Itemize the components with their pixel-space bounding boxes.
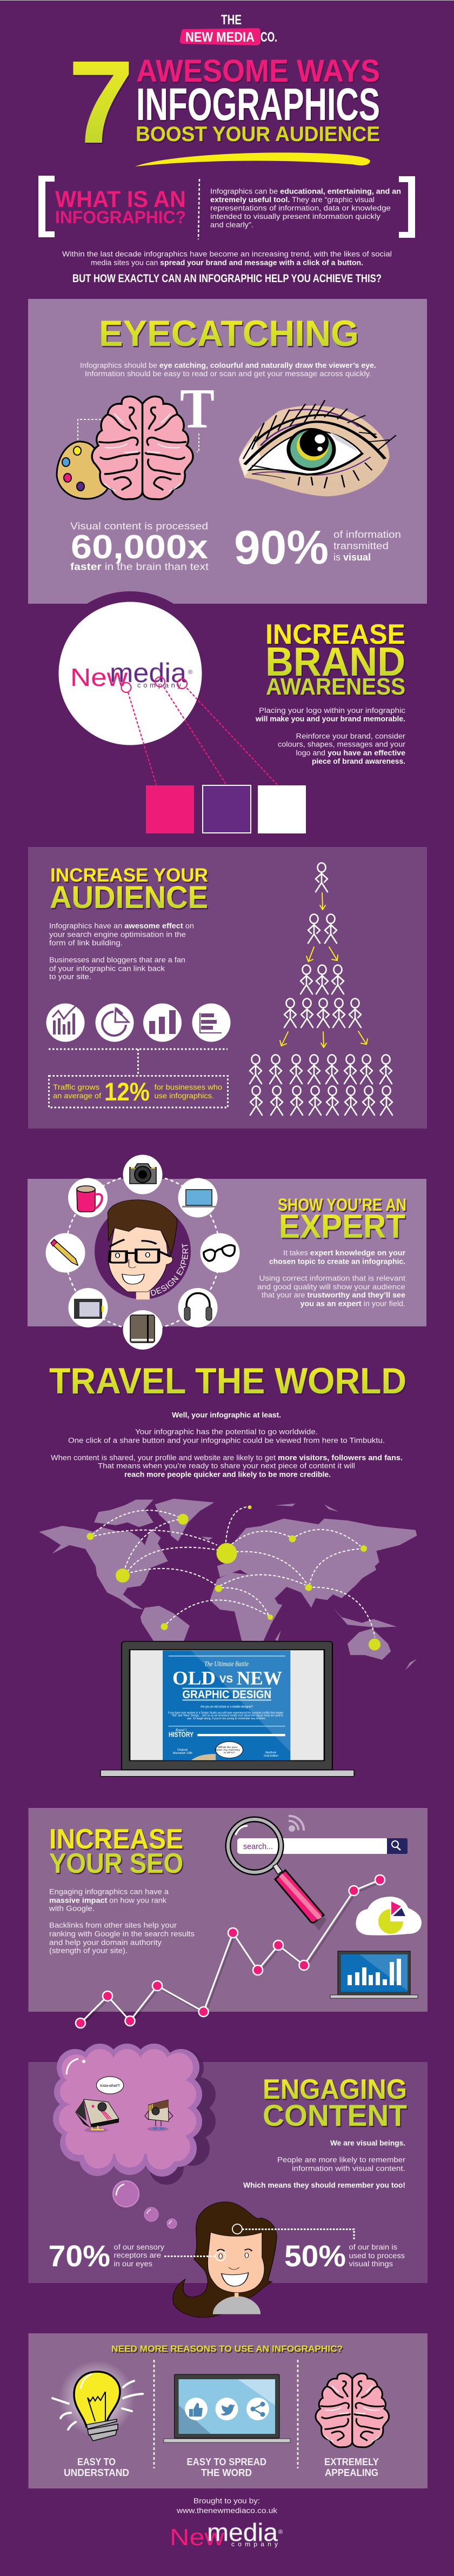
audience text: Businesses and bloggers that are a fan bbox=[49, 956, 185, 964]
heading: increase your seo: INCREASE bbox=[49, 1824, 183, 1855]
stat: 50% bbox=[232, 2224, 405, 2273]
connector and traffic callout: an average of bbox=[53, 1091, 101, 1100]
expert text: It takes expert knowledge on your bbox=[283, 1249, 406, 1257]
heading: increase brand awareness: BRAND bbox=[265, 639, 405, 684]
expert text: chosen topic to create an infographic. bbox=[269, 1257, 405, 1266]
brand text: logo and you have an effective bbox=[296, 749, 406, 757]
stat: 90%: is visual bbox=[333, 551, 371, 563]
panel: what is an infographic: and clearly”. bbox=[210, 221, 253, 229]
laptop with infographic: OLD bbox=[172, 1667, 216, 1689]
audience text bbox=[49, 922, 194, 980]
icon: brain bbox=[316, 2373, 389, 2447]
icon: mug bbox=[68, 1178, 108, 1217]
engaging text bbox=[243, 2139, 406, 2189]
audience text: Infographics have an awesome effect on bbox=[49, 922, 194, 930]
dashed dividers bbox=[154, 2360, 298, 2468]
icon: tablet bbox=[68, 1288, 108, 1327]
expert text: Using correct information that is relevant bbox=[259, 1274, 405, 1282]
yellow swoosh bbox=[135, 152, 370, 166]
stat: 70%: 70% bbox=[49, 2239, 110, 2273]
instagram camera character bbox=[145, 2100, 173, 2131]
panel: what is an infographic: representations of information, data or knowledge bbox=[210, 204, 391, 212]
character badge bbox=[95, 1199, 191, 1299]
panel: travel the world bbox=[39, 1360, 417, 1777]
intro text bbox=[62, 250, 392, 285]
stat: 90%: 90% bbox=[234, 520, 329, 574]
seo text: and help your domain authority bbox=[49, 1938, 162, 1947]
panel: what is an infographic: extremely useful tool. They are “graphic visual bbox=[210, 196, 375, 204]
brand logo: The New Media Co. bbox=[180, 12, 277, 45]
engaging text: information with visual content. bbox=[292, 2164, 405, 2173]
expert text: and good quality will show your audience bbox=[257, 1283, 405, 1291]
seo text bbox=[49, 1887, 195, 1954]
speech bubble bbox=[96, 2077, 123, 2094]
heading: engaging content bbox=[263, 2074, 407, 2132]
travel text bbox=[51, 1411, 403, 1479]
laptop with infographic bbox=[101, 1641, 354, 1777]
laptop with infographic: The Ultimate Battle bbox=[204, 1659, 249, 1668]
expert text: you as an expert in your field. bbox=[301, 1299, 405, 1308]
new media logo: New bbox=[70, 663, 128, 691]
panel: engaging content bbox=[28, 2044, 428, 2318]
stat: 60,000x: 60,000x bbox=[71, 529, 209, 566]
icon: laptop with bars bbox=[330, 1951, 418, 1998]
brand text: will make you and your brand memorable. bbox=[255, 715, 405, 723]
connector and traffic callout: 12% bbox=[104, 1077, 150, 1106]
new media logo: company bbox=[137, 681, 182, 689]
stat: 90%: transmitted bbox=[333, 540, 389, 551]
connector and traffic callout: Traffic grows bbox=[53, 1083, 99, 1091]
reason labels: EASY TO bbox=[77, 2457, 116, 2467]
icon: cloud with pie chart bbox=[356, 1897, 422, 1936]
dashed orbit bbox=[65, 1175, 220, 1330]
colour sampling lines bbox=[121, 677, 277, 785]
reasons heading: NEED MORE REASONS TO USE AN INFOGRAPHIC? bbox=[111, 2344, 343, 2354]
icon: eye bbox=[239, 400, 396, 496]
panel: what is an infographic: WHAT IS AN bbox=[55, 186, 186, 212]
icon: horizontal bars bbox=[192, 1003, 230, 1042]
panel: what is an infographic: Infographics can be educational, entertaining, and an bbox=[210, 187, 401, 196]
brand text: piece of brand awareness. bbox=[312, 757, 405, 765]
world map bbox=[39, 1499, 417, 1670]
intro text: Within the last decade infographics have become an increasing trend, with the likes of social bbox=[62, 250, 392, 258]
panel: what is an infographic bbox=[38, 176, 415, 239]
panel: eyecatching bbox=[28, 299, 427, 604]
stat: 50%: used to process bbox=[349, 2252, 405, 2260]
laptop with infographic: Original bbox=[177, 1749, 188, 1752]
icon: magnifying glass bbox=[228, 1819, 326, 1931]
footer credit: www.thenewmediaco.co.uk bbox=[176, 2507, 277, 2514]
intro text: BUT HOW EXACTLY CAN AN INFOGRAPHIC HELP YOU ACHIEVE THIS? bbox=[72, 272, 382, 285]
title: 7 bbox=[68, 37, 134, 168]
stat: 90%: of information bbox=[333, 529, 401, 540]
audience text: form of link building. bbox=[49, 939, 123, 947]
heading: increase your seo: YOUR SEO bbox=[49, 1848, 183, 1879]
laptop with infographic: NEW bbox=[237, 1667, 282, 1689]
heading: travel the world: TRAVEL THE WORLD bbox=[49, 1360, 406, 1402]
speech bubble: Insta-what?! bbox=[100, 2083, 120, 2088]
laptop with infographic: What do you bbox=[218, 1746, 238, 1749]
map location dots bbox=[86, 1505, 380, 1651]
engaging text: Which means they should remember you too! bbox=[243, 2181, 405, 2189]
icon: pencil bbox=[45, 1233, 85, 1272]
footer logo bbox=[170, 2518, 283, 2551]
brand logo: The New Media Co.: THE bbox=[221, 12, 242, 28]
icon: line chart bbox=[46, 1003, 84, 1042]
intro text: media sites you can spread your brand and message with a click of a button. bbox=[91, 258, 363, 267]
icon: notebook bbox=[123, 1310, 162, 1350]
expert text bbox=[257, 1249, 406, 1308]
icon: camera bbox=[123, 1154, 162, 1194]
panel: what is an infographic: intended to visually present information quickly bbox=[210, 212, 380, 221]
laptop with infographic: VS bbox=[219, 1674, 233, 1685]
heading: increase brand awareness: INCREASE bbox=[265, 619, 405, 650]
icon: light bulb bbox=[52, 2360, 143, 2441]
reason labels: EXTREMELY bbox=[324, 2457, 379, 2467]
heading: increase your audience: INCREASE YOUR bbox=[50, 865, 208, 886]
panel: show you're an expert bbox=[28, 1154, 426, 1350]
travel text: reach more people quicker and likely to be more credible. bbox=[124, 1470, 331, 1479]
thought cloud bbox=[53, 2044, 216, 2185]
laptop with infographic: Macintosh 128k bbox=[173, 1752, 193, 1755]
people pyramid bbox=[250, 863, 392, 1115]
reason labels: THE WORD bbox=[201, 2467, 252, 2478]
icon: letter T: T bbox=[180, 377, 215, 440]
icon: laptop with social buttons bbox=[164, 2374, 290, 2442]
laptop with infographic: “Old” and “New” Design... Join us as we reminisce fondly (no!) about the classic tools we used to bbox=[171, 1714, 283, 1718]
title: BOOST YOUR AUDIENCE bbox=[136, 123, 380, 146]
audience text: of your infographic can link back bbox=[49, 964, 165, 973]
heading: show you're an expert: EXPERT bbox=[279, 1208, 405, 1245]
icon: pie chart bbox=[95, 1003, 134, 1042]
character: woman bbox=[173, 2202, 277, 2318]
new media logo: ® bbox=[188, 669, 192, 676]
footer credit: Brought to you by: bbox=[193, 2497, 260, 2505]
stat: 70%: receptors are bbox=[114, 2251, 161, 2259]
engaging text: People are more likely to remember bbox=[277, 2155, 406, 2164]
laptop with infographic: MacBook bbox=[265, 1751, 276, 1754]
laptop with infographic: Gold Edition bbox=[264, 1754, 278, 1758]
brand text bbox=[255, 706, 406, 765]
laptop with infographic: Round 1 bbox=[175, 1728, 187, 1732]
panel: what is an infographic: INFOGRAPHIC? bbox=[55, 208, 186, 227]
laptop with infographic: mean my memory bbox=[215, 1749, 241, 1751]
icon: bar chart bbox=[143, 1003, 182, 1042]
footer logo: company bbox=[231, 2540, 278, 2548]
seo text: Backlinks from other sites help your bbox=[49, 1921, 177, 1930]
heading: increase brand awareness bbox=[265, 619, 405, 700]
footer logo: New bbox=[170, 2524, 224, 2551]
seo text: Engaging infographics can have a bbox=[49, 1887, 169, 1896]
logo circle bbox=[58, 602, 202, 745]
search bar: search... bbox=[243, 1842, 273, 1851]
stat: 50%: 50% bbox=[284, 2239, 346, 2273]
travel text: When content is shared, your profile and website are likely to get more visitors, followers and fans. bbox=[51, 1454, 403, 1461]
icon: paint palette bbox=[57, 442, 108, 499]
connector and traffic callout: use infographics. bbox=[155, 1091, 214, 1100]
seo text: ranking with Google in the search results bbox=[49, 1930, 195, 1938]
yellow growth arrows bbox=[280, 893, 368, 1047]
travel text: Well, your infographic at least. bbox=[172, 1411, 281, 1419]
new media logo bbox=[70, 658, 192, 691]
footer logo: media bbox=[207, 2518, 278, 2546]
audience text: your search engine optimisation in the bbox=[49, 931, 186, 938]
heading: engaging content: CONTENT bbox=[263, 2098, 407, 2132]
brand text: colours, shapes, messages and your bbox=[278, 740, 406, 748]
brand logo: The New Media Co.: NEW MEDIA bbox=[185, 30, 255, 45]
panel: increase your audience bbox=[28, 847, 427, 1129]
stat: 70% bbox=[49, 2239, 225, 2273]
icon: headphones bbox=[178, 1288, 217, 1327]
footer logo: ® bbox=[278, 2529, 283, 2535]
eyecatching text bbox=[80, 361, 376, 378]
seo text: massive impact on how you rank bbox=[49, 1896, 166, 1905]
heading: show you're an expert: SHOW YOU’RE AN bbox=[278, 1195, 406, 1214]
stat: 70%: of our sensory bbox=[114, 2243, 164, 2251]
icon: dotted connectors bbox=[78, 419, 199, 452]
heading: eyecatching: EYECATCHING bbox=[99, 313, 359, 354]
search bar bbox=[237, 1838, 408, 1854]
heading: increase your audience: AUDIENCE bbox=[50, 880, 208, 915]
reason labels bbox=[64, 2457, 379, 2478]
seo text: (strength of your site). bbox=[49, 1947, 128, 1954]
travel text: Your infographic has the potential to go worldwide. bbox=[135, 1428, 318, 1436]
thought bubbles bbox=[113, 2181, 177, 2228]
connector and traffic callout: for businesses who bbox=[155, 1083, 222, 1091]
icon: wifi signal bbox=[289, 1816, 304, 1832]
stat: 60,000x bbox=[70, 520, 209, 572]
icon: glasses bbox=[200, 1233, 240, 1272]
stat: 70%: in our eyes bbox=[114, 2260, 152, 2268]
stat: 50%: visual things bbox=[349, 2260, 393, 2268]
circle cut-out bbox=[48, 591, 212, 756]
laptop with infographic: If you have ever worked in a Design Studio you will have experienced the constant conflict that wages bbox=[168, 1711, 283, 1714]
laptop with infographic: is d#*s? bbox=[224, 1751, 235, 1754]
footer credit bbox=[176, 2497, 277, 2514]
seo text: with Google. bbox=[49, 1905, 95, 1912]
icon: laptop bbox=[178, 1178, 217, 1217]
character badge: DESIGN EXPERT bbox=[150, 1244, 188, 1296]
heading: increase your audience bbox=[50, 865, 208, 915]
audience text: to your site. bbox=[49, 973, 91, 980]
laptop with infographic: Are you an old school or a newbie designer? bbox=[201, 1705, 253, 1709]
brand text: Placing your logo within your infographic bbox=[259, 706, 405, 715]
travel text: That means when you’re ready to share your next piece of content it will bbox=[98, 1461, 355, 1470]
reason labels: APPEALING bbox=[325, 2467, 378, 2478]
brand logo: The New Media Co.: CO. bbox=[261, 30, 277, 45]
laptop with infographic: use. Or laugh along, if you’re too young to remember any of them. bbox=[187, 1717, 266, 1720]
line chart bbox=[76, 1875, 385, 2028]
engaging text: We are visual beings. bbox=[330, 2139, 405, 2147]
new media logo: media bbox=[110, 658, 186, 688]
stat: 60,000x: faster in the brain than text bbox=[70, 561, 209, 572]
panel: brand awareness bbox=[28, 591, 406, 833]
laptop with infographic: GRAPHIC DESIGN bbox=[183, 1689, 271, 1701]
reason labels: EASY TO SPREAD bbox=[187, 2457, 266, 2467]
icon: brain bbox=[92, 396, 193, 499]
stat: 90% bbox=[234, 520, 401, 574]
heading: increase brand awareness: AWARENESS bbox=[266, 673, 405, 700]
heading: increase your seo bbox=[49, 1824, 183, 1879]
eyecatching text: Infographics should be eye catching, colourful and naturally draw the viewer’s eye. bbox=[80, 361, 376, 370]
stat: 60,000x: Visual content is processed bbox=[70, 520, 208, 532]
colour swatches bbox=[146, 785, 306, 833]
brand text: Reinforce your brand, consider bbox=[296, 732, 406, 740]
heading: engaging content: ENGAGING bbox=[263, 2074, 407, 2105]
expert text: that your are trustworthy and they’ll see bbox=[262, 1291, 406, 1299]
laptop with infographic: HISTORY bbox=[169, 1731, 193, 1739]
panel: increase your seo bbox=[28, 1808, 428, 2028]
connector and traffic callout bbox=[49, 1049, 228, 1107]
title bbox=[68, 37, 380, 168]
travel text: One click of a share button and your infographic could be viewed from here to Timbuktu. bbox=[68, 1437, 385, 1444]
title: AWESOME WAYS bbox=[136, 54, 380, 89]
stat: 50%: of our brain is bbox=[349, 2243, 397, 2251]
eyecatching text: Information should be easy to read or scan and get your message across quickly. bbox=[85, 370, 371, 378]
panel: need more reasons bbox=[28, 2333, 428, 2488]
reason labels: UNDERSTAND bbox=[64, 2467, 129, 2478]
polaroid camera character bbox=[75, 2099, 119, 2133]
